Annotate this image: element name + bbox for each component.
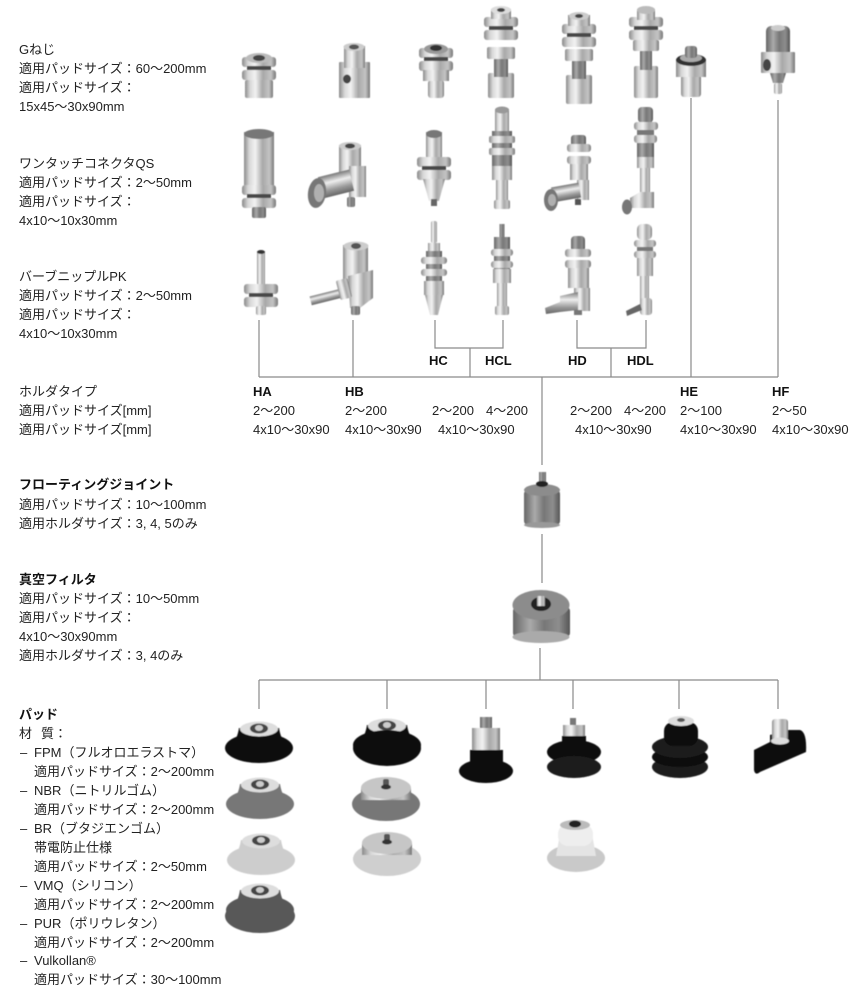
text: floating joint	[19, 477, 206, 531]
part: HD G thread	[562, 12, 596, 104]
holder type labels	[253, 353, 849, 437]
text: G thread: 適用パッドサイズ：60～200mm	[19, 61, 206, 76]
pad: grey with metal disc	[352, 777, 420, 821]
part: HC G thread	[419, 44, 453, 98]
text: pad materials: 適用パッドサイズ：2～200mm	[34, 802, 214, 817]
spec: HD and HDL: 4x10～30x90	[575, 422, 652, 437]
part: HA barb nipple PK	[244, 250, 278, 315]
part: HB barb nipple PK	[310, 242, 373, 315]
spec: HE: 2～100	[680, 403, 722, 418]
spec: HD and HDL: 2～200	[570, 403, 612, 418]
text: G thread: Gねじ	[19, 42, 55, 57]
label: HC: HC	[429, 353, 448, 368]
text: floating joint: 適用ホルダサイズ：3, 4, 5のみ	[19, 516, 198, 531]
part: HCL one-touch QS	[489, 106, 515, 209]
pad: FPM flat black	[225, 722, 293, 763]
spec: HB: HB	[345, 384, 364, 399]
left column: holder and accessory specifications	[19, 42, 221, 987]
pad: NBR flat grey	[226, 778, 294, 819]
part: floating joint	[524, 472, 560, 528]
text: barb nipple PK: 4x10～10x30mm	[19, 326, 117, 341]
text: barb nipple PK: 適用パッドサイズ：	[19, 307, 136, 322]
spec: HC and HCL	[432, 403, 528, 437]
label: HCL: HCL	[485, 353, 512, 368]
holder photo grid	[225, 6, 806, 933]
part: vacuum filter	[512, 590, 570, 643]
part: HA G thread	[242, 53, 276, 98]
text: pad materials: VMQ（シリコン）	[34, 878, 142, 893]
part: HC one-touch QS	[417, 130, 451, 206]
pad: black large flat	[353, 718, 421, 766]
spec: HE	[680, 384, 757, 437]
part: HB one-touch QS	[306, 142, 366, 209]
spec: HA: HA	[253, 384, 272, 399]
text: barb nipple PK: 適用パッドサイズ：2～50mm	[19, 288, 192, 303]
spec: HB	[345, 384, 422, 437]
text: holder type: 適用パッドサイズ[mm]	[19, 403, 152, 418]
part: HCL G thread	[484, 6, 518, 98]
text: holder type	[19, 384, 152, 437]
text: pad materials: パッド	[19, 707, 58, 722]
pad: threaded black	[459, 717, 513, 783]
text: pad materials: –	[20, 821, 27, 836]
pad: VMQ flat dark grey	[225, 884, 295, 933]
spec: HB: 4x10～30x90	[345, 422, 422, 437]
label: HDL: HDL	[627, 353, 654, 368]
text: pad materials: –	[20, 953, 27, 968]
text: pad materials: 帯電防止仕様	[34, 840, 112, 855]
pad: light with metal disc	[353, 832, 421, 876]
part: HB G thread	[339, 43, 370, 98]
spec: HD and HDL: 4～200	[624, 403, 666, 418]
text: one-touch connector QS: 適用パッドサイズ：2～50mm	[19, 175, 192, 190]
text: one-touch connector QS: ワンタッチコネクタQS	[19, 156, 155, 171]
spec: HA	[253, 384, 330, 437]
spec: HC and HCL: 4x10～30x90	[438, 422, 515, 437]
spec: HF	[772, 384, 849, 437]
spec: HD and HDL	[570, 403, 666, 437]
text: pad materials: 適用パッドサイズ：2～200mm	[34, 897, 214, 912]
text: pad materials: 適用パッドサイズ：2～50mm	[34, 859, 207, 874]
pad: multi-bellows black	[652, 716, 708, 778]
part: HCL barb nipple PK	[491, 224, 513, 315]
text: G thread: 適用パッドサイズ：	[19, 80, 136, 95]
text: pad materials: Vulkollan®	[34, 953, 96, 968]
spec: HE: 4x10～30x90	[680, 422, 757, 437]
text: vacuum filter: 適用パッドサイズ：	[19, 610, 136, 625]
spec: HF: 4x10～30x90	[772, 422, 849, 437]
text: pad materials: FPM（フルオロエラストマ）	[34, 745, 204, 760]
text: G thread: 15x45～30x90mm	[19, 99, 124, 114]
part: HA one-touch QS	[242, 129, 276, 218]
part: HC barb nipple PK	[421, 221, 447, 315]
text: pad materials: –	[20, 878, 27, 893]
text: pad materials: –	[20, 916, 27, 931]
text: one-touch connector QS: 4x10～10x30mm	[19, 213, 117, 228]
text: one-touch connector QS	[19, 156, 192, 228]
text: pad materials: 質：	[41, 726, 67, 741]
spec: HF: HF	[772, 384, 789, 399]
text: G thread	[19, 42, 206, 114]
text: barb nipple PK	[19, 269, 192, 341]
text: pad materials: –	[20, 745, 27, 760]
part: HDL G thread	[629, 6, 663, 98]
spec: HE: HE	[680, 384, 698, 399]
part: HF G thread	[761, 25, 795, 94]
text: vacuum filter: 適用パッドサイズ：10～50mm	[19, 591, 199, 606]
part: HDL one-touch QS	[622, 107, 658, 214]
text: pad materials: NBR（ニトリルゴム）	[34, 783, 165, 798]
pad: bellows white	[547, 820, 605, 872]
text: vacuum filter: 真空フィルタ	[19, 572, 97, 587]
spec: HB: 2～200	[345, 403, 387, 418]
text: holder type: ホルダタイプ	[19, 384, 97, 399]
spec: HC and HCL: 4～200	[486, 403, 528, 418]
spec: HF: 2～50	[772, 403, 807, 418]
text: floating joint: フローティングジョイント	[19, 477, 174, 492]
part: HD barb nipple PK	[545, 236, 591, 315]
part: HE G thread	[676, 46, 706, 97]
pad: bellows with nut	[547, 718, 601, 778]
spec: HA: 4x10～30x90	[253, 422, 330, 437]
label: HD: HD	[568, 353, 587, 368]
spec: HC and HCL: 2～200	[432, 403, 474, 418]
text: pad materials: 適用パッドサイズ：2～200mm	[34, 935, 214, 950]
text: pad materials: –	[20, 783, 27, 798]
text: vacuum filter: 4x10～30x90mm	[19, 629, 117, 644]
connector lines	[259, 98, 778, 709]
text: holder type: 適用パッドサイズ[mm]	[19, 422, 152, 437]
text: pad materials: PUR（ポリウレタン）	[34, 916, 165, 931]
text: pad materials	[19, 707, 221, 987]
text: pad materials: BR（ブタジエンゴム）	[34, 821, 169, 836]
part: HDL barb nipple PK	[626, 224, 656, 316]
pad: BR flat light	[227, 834, 295, 875]
pad: oval black with thread	[754, 719, 806, 774]
part: HD one-touch QS	[544, 135, 591, 211]
text: floating joint: 適用パッドサイズ：10～100mm	[19, 497, 206, 512]
spec: HA: 2～200	[253, 403, 295, 418]
text: one-touch connector QS: 適用パッドサイズ：	[19, 194, 136, 209]
text: pad materials: 適用パッドサイズ：30～100mm	[34, 972, 221, 987]
text: pad materials: 材	[19, 726, 32, 741]
text: pad materials: 適用パッドサイズ：2～200mm	[34, 764, 214, 779]
text: barb nipple PK: バーブニップルPK	[19, 269, 127, 284]
text: vacuum filter	[19, 572, 199, 663]
text: vacuum filter: 適用ホルダサイズ：3, 4のみ	[19, 648, 183, 663]
